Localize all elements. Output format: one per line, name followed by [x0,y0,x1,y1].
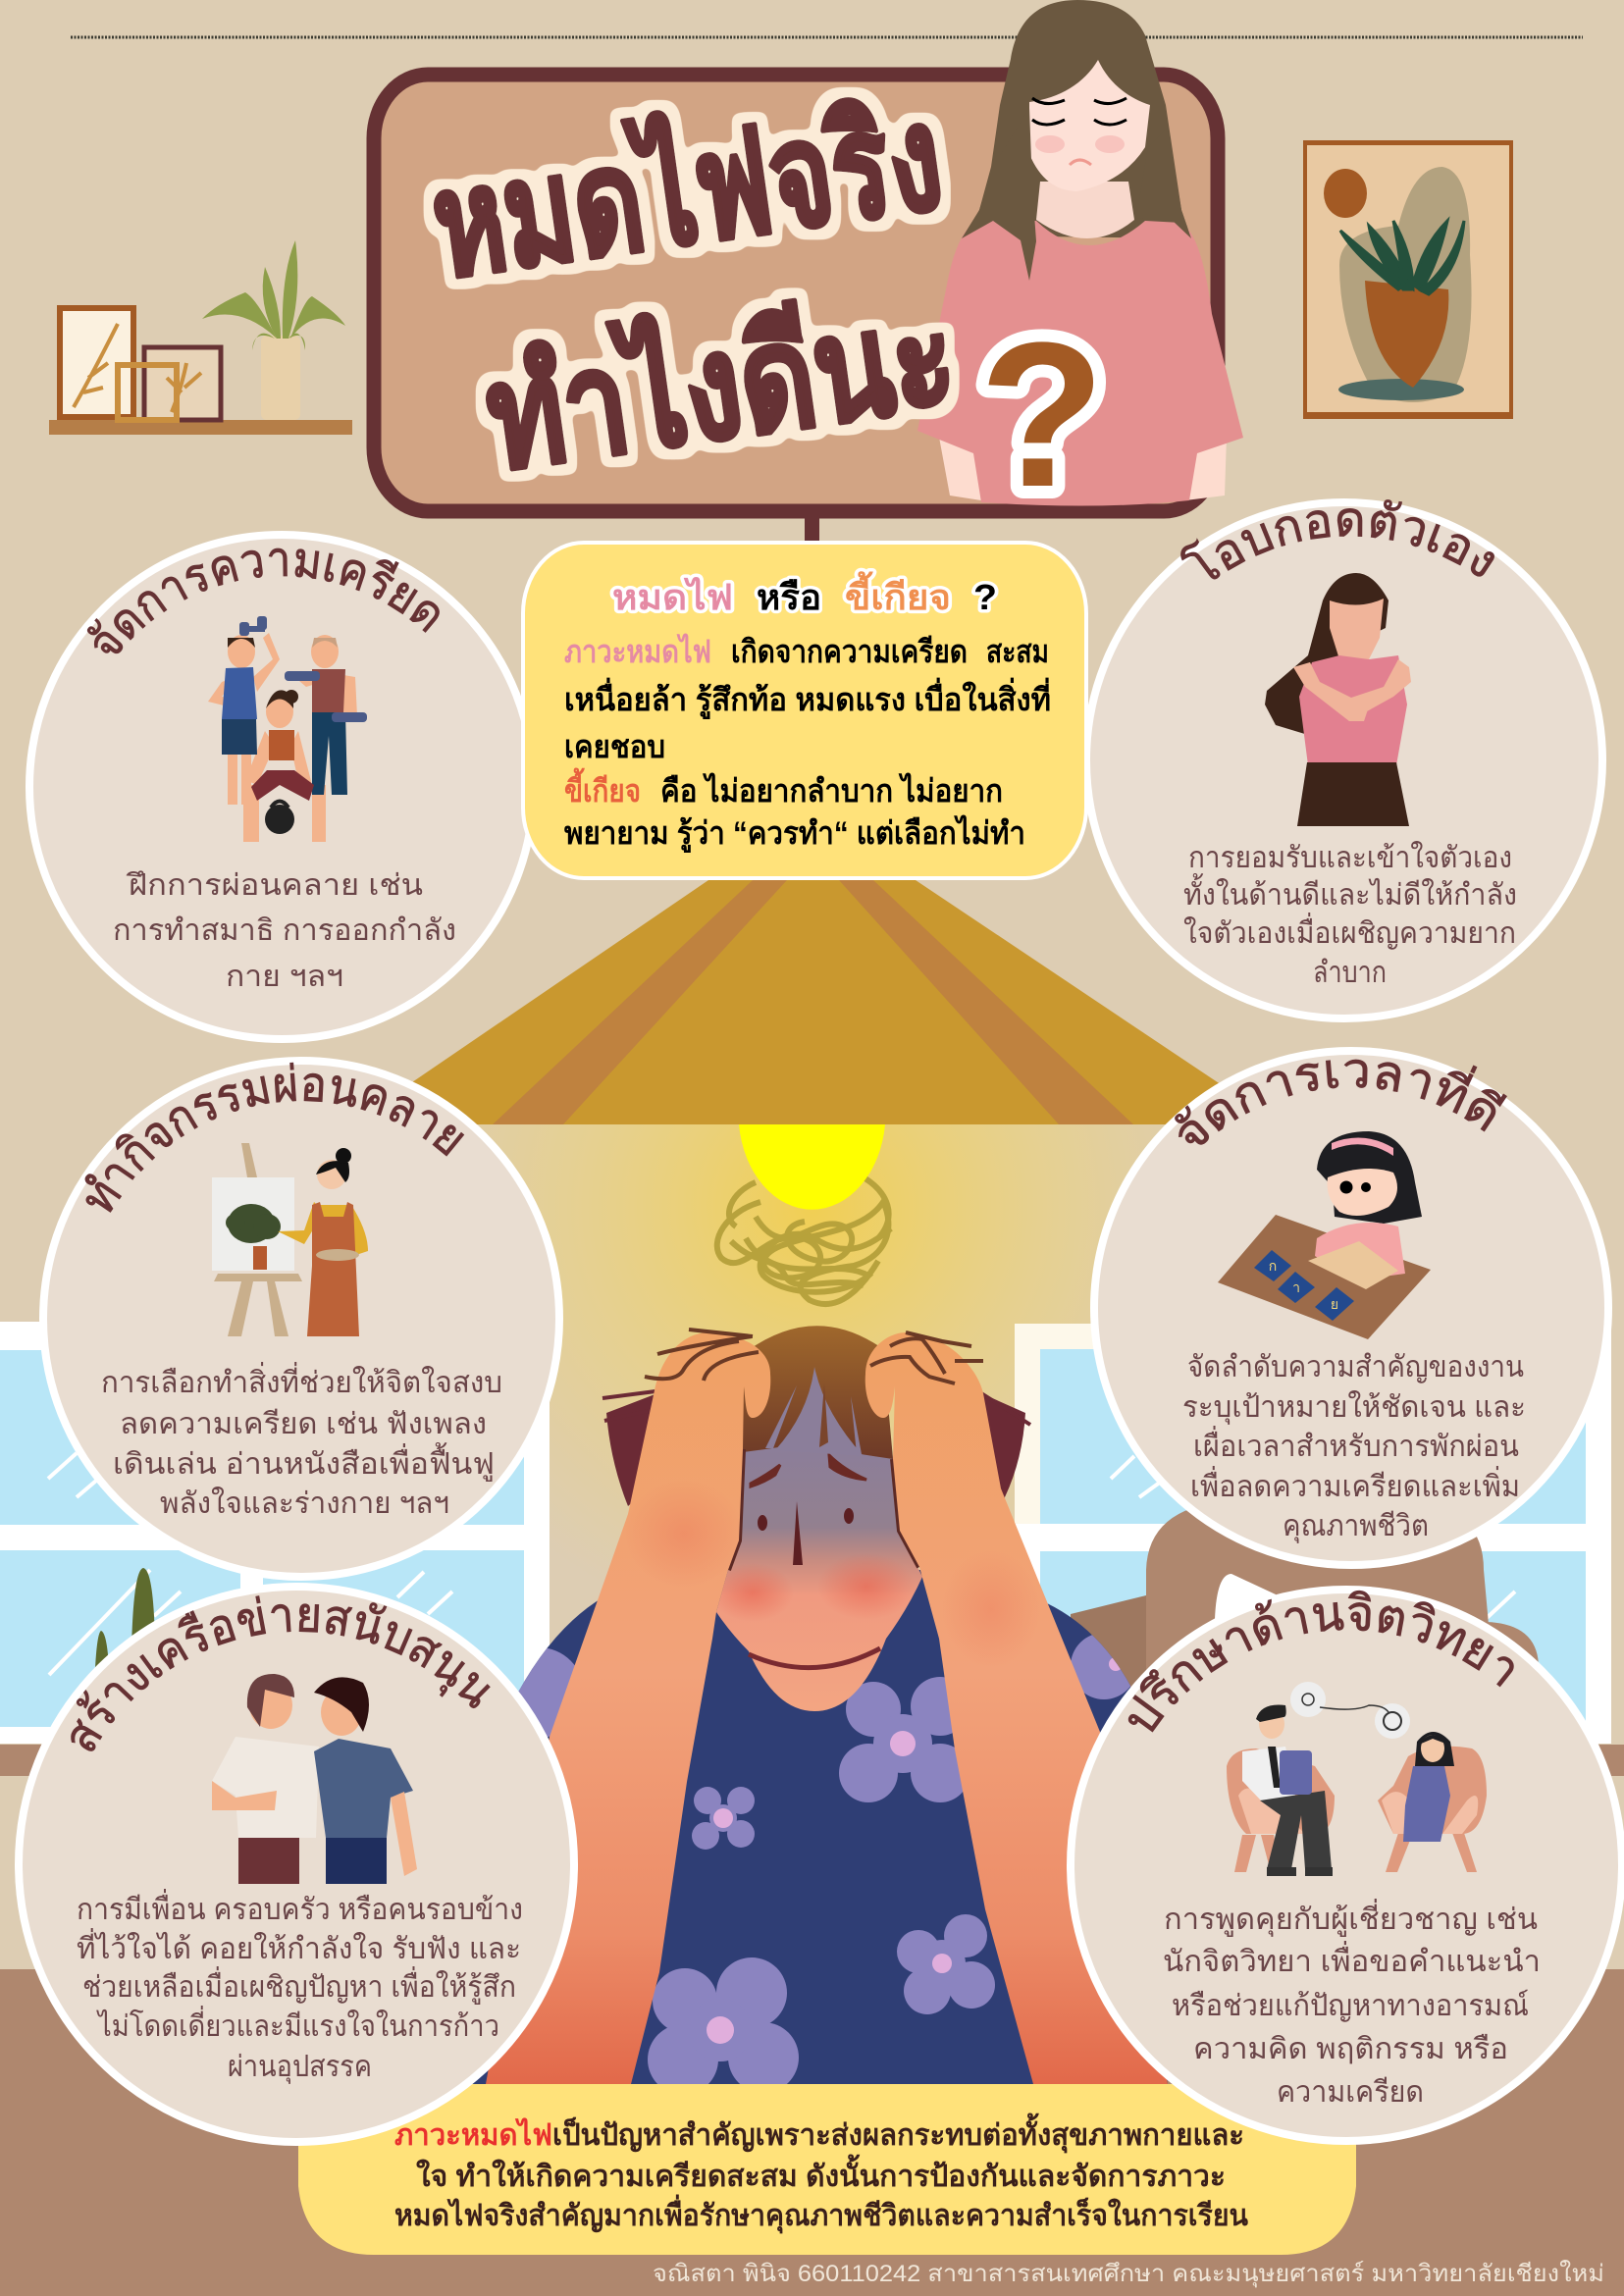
body text: ไม่โดดเดี่ยวและมีแรงใจในการก้าว [96,2006,499,2043]
floor [0,1969,1624,2296]
body text [77,1889,523,2085]
neck [1036,182,1134,238]
body text: พลังใจและร่างกาย ฯลฯ [160,1487,449,1520]
circle: self hug [1087,498,1606,1022]
right framed plant picture [1303,140,1513,419]
box heading: ? [973,577,997,617]
box heading: ขี้เกียจ [845,571,951,617]
box body: ภาวะหมดไฟ [564,633,711,669]
person: right arm [865,1332,1168,2084]
shirt flowers [494,1633,1137,2095]
title board [374,75,1218,511]
body text: ช่วยเหลือเมื่อเผชิญปัญหา เพื่อให้รู้สึก [82,1966,516,2005]
body text: ลำบาก [1313,957,1387,989]
icon: girl studying at desk: า [1292,1279,1300,1295]
lamp glow [381,1123,1244,1732]
summary text: ใจ ทำให้เกิดความเครียดสะสม ดังนั้นการป้องกันและจัดการภาวะ [416,2154,1226,2193]
box body [564,633,1051,854]
body text: ผ่านอุปสรรค [228,2051,372,2085]
body text [113,869,456,993]
icon: girl studying at desk: ก [1269,1258,1277,1274]
person: side hair [602,1391,1030,1506]
body text: จัดลำดับความสำคัญของงาน [1187,1351,1524,1383]
face [1029,60,1150,191]
window right [1015,1324,1611,1744]
front hair strands [962,108,1191,281]
credit line: จณิสตา พินิจ 660110242 สาขาสารสนเทศศึกษา คณะมนุษยศาสตร์ มหาวิทยาลัยเชียงใหม่ [653,2260,1604,2288]
title board stem [805,515,819,545]
body text: ฝึกการผ่อนคลาย เช่น [126,869,423,902]
person: left arm [486,1330,770,2084]
body text: หรือช่วยแก้ปัญหาทางอารมณ์ [1172,1989,1529,2022]
body text: ที่ไว้ใจได้ คอยให้กำลังใจ รับฟัง และ [77,1928,521,1965]
heading: ทำกิจกรรมผ่อนคลาย [84,1062,465,1213]
circle: relaxing activities [39,1057,563,1581]
hair [743,1326,893,1459]
centre definition box [523,543,1086,878]
body text: การมีเพื่อน ครอบครัว หรือคนรอบข้าง [77,1889,523,1926]
window left [0,1322,550,1744]
summary text [394,2113,1248,2234]
body text: การยอมรับและเข้าใจตัวเอง [1188,841,1512,874]
woman character [917,0,1243,506]
box body: คือ ไม่อยากลำบาก ไม่อยาก [660,772,1003,809]
box heading: หมดไฟ [612,576,733,617]
body text: คุณภาพชีวิต [1283,1510,1429,1544]
body text [1163,1899,1541,2109]
light bulb [739,1124,885,1210]
summary text: ภาวะหมดไฟเป็นปัญหาสำคัญเพราะส่งผลกระทบต่อทั้งสุขภาพกายและ [394,2113,1244,2154]
lamp shade [350,880,1281,1124]
title text: หมดไฟจริง [423,75,951,308]
body text: กาย ฯลฯ [226,961,343,993]
back hair [967,0,1191,238]
body text: เพื่อลดความเครียดและเพิ่ม [1190,1466,1520,1503]
shirt [917,219,1243,506]
icon: girl studying at desk [1218,1131,1431,1339]
body text [101,1362,502,1520]
body text: ความคิด พฤติกรรม หรือ [1193,2033,1508,2065]
dotted line [71,35,1583,39]
face features [1032,98,1126,165]
body text [1183,841,1517,989]
bottom summary box [298,2084,1356,2255]
icon: two friends [212,1674,417,1884]
person: shirt [471,1570,1168,2095]
summary text: หมดไฟจริงสำคัญมากเพื่อรักษาคุณภาพชีวิตและความสำเร็จในการเรียน [394,2194,1248,2234]
body text: ลดความเครียด เช่น ฟังเพลง [120,1408,487,1440]
icon: counselling session [1227,1682,1487,1876]
body text: นักจิตวิทยา เพื่อขอคำแนะนำ [1163,1941,1541,1978]
box body: พยายาม รู้ว่า “ควรทำ“ แต่เลือกไม่ทำ [564,814,1025,854]
icon: exercising people [208,616,367,842]
body text: ทั้งในด้านดีและไม่ดีให้กำลัง [1183,873,1517,912]
title text [423,75,965,500]
baseboard [0,1745,1624,1776]
box body: เกิดจากความเครียด [731,634,968,669]
box body: เคยชอบ [564,729,665,764]
box body: สะสม [986,634,1049,669]
sofa [1071,1501,1539,1766]
body text: ใจตัวเองเมื่อเผชิญความยาก [1183,913,1516,950]
circle: support network [15,1583,578,2146]
box heading: หรือ [757,577,821,617]
body text: เผื่อเวลาสำหรับการพักผ่อน [1193,1426,1519,1463]
tangled scribble [717,1177,891,1304]
title text: ทำไงดีนะ [477,273,965,500]
heading: ปรึกษาด้านจิตวิทยา [1128,1590,1514,1733]
arms [938,432,1227,500]
box body: เหนื่อยล้า รู้สึกท้อ หมดแรง เบื่อในสิ่งที่ [564,677,1051,720]
circle: time management [1090,1047,1612,1569]
icon: girl studying at desk: ย [1331,1296,1338,1312]
left shelf with frames and plant [49,240,352,435]
heading: จัดการเวลาที่ดี [1175,1060,1507,1145]
body text: เดินเล่น อ่านหนังสือเพื่อฟื้นฟู [113,1442,495,1482]
heading: โอบกอดตัวเอง [1180,499,1494,579]
box heading [612,571,997,617]
icon: painter at easel [212,1143,368,1336]
box body: ขี้เกียจ [564,767,641,809]
circle: psychological counselling [1067,1586,1624,2145]
heading: สร้างเครือข่ายสนับสนุน [71,1595,491,1751]
body text [1182,1351,1526,1544]
icon: woman hugging herself [1265,573,1411,826]
body text: การพูดคุยกับผู้เชี่ยวชาญ เช่น [1164,1899,1538,1938]
body text: การทำสมาธิ การออกกำลัง [113,914,456,947]
body text: ระบุเป้าหมายให้ชัดเจน และ [1182,1390,1526,1426]
body text: การเลือกทำสิ่งที่ช่วยให้จิตใจสงบ [101,1362,502,1399]
heading: จัดการความเครียด [86,548,440,653]
plant behind window [95,1568,155,1668]
question mark: ? [979,299,1105,530]
person: head [711,1326,922,1711]
body text: ความเครียด [1277,2076,1424,2109]
circle: stress management [26,531,531,1043]
